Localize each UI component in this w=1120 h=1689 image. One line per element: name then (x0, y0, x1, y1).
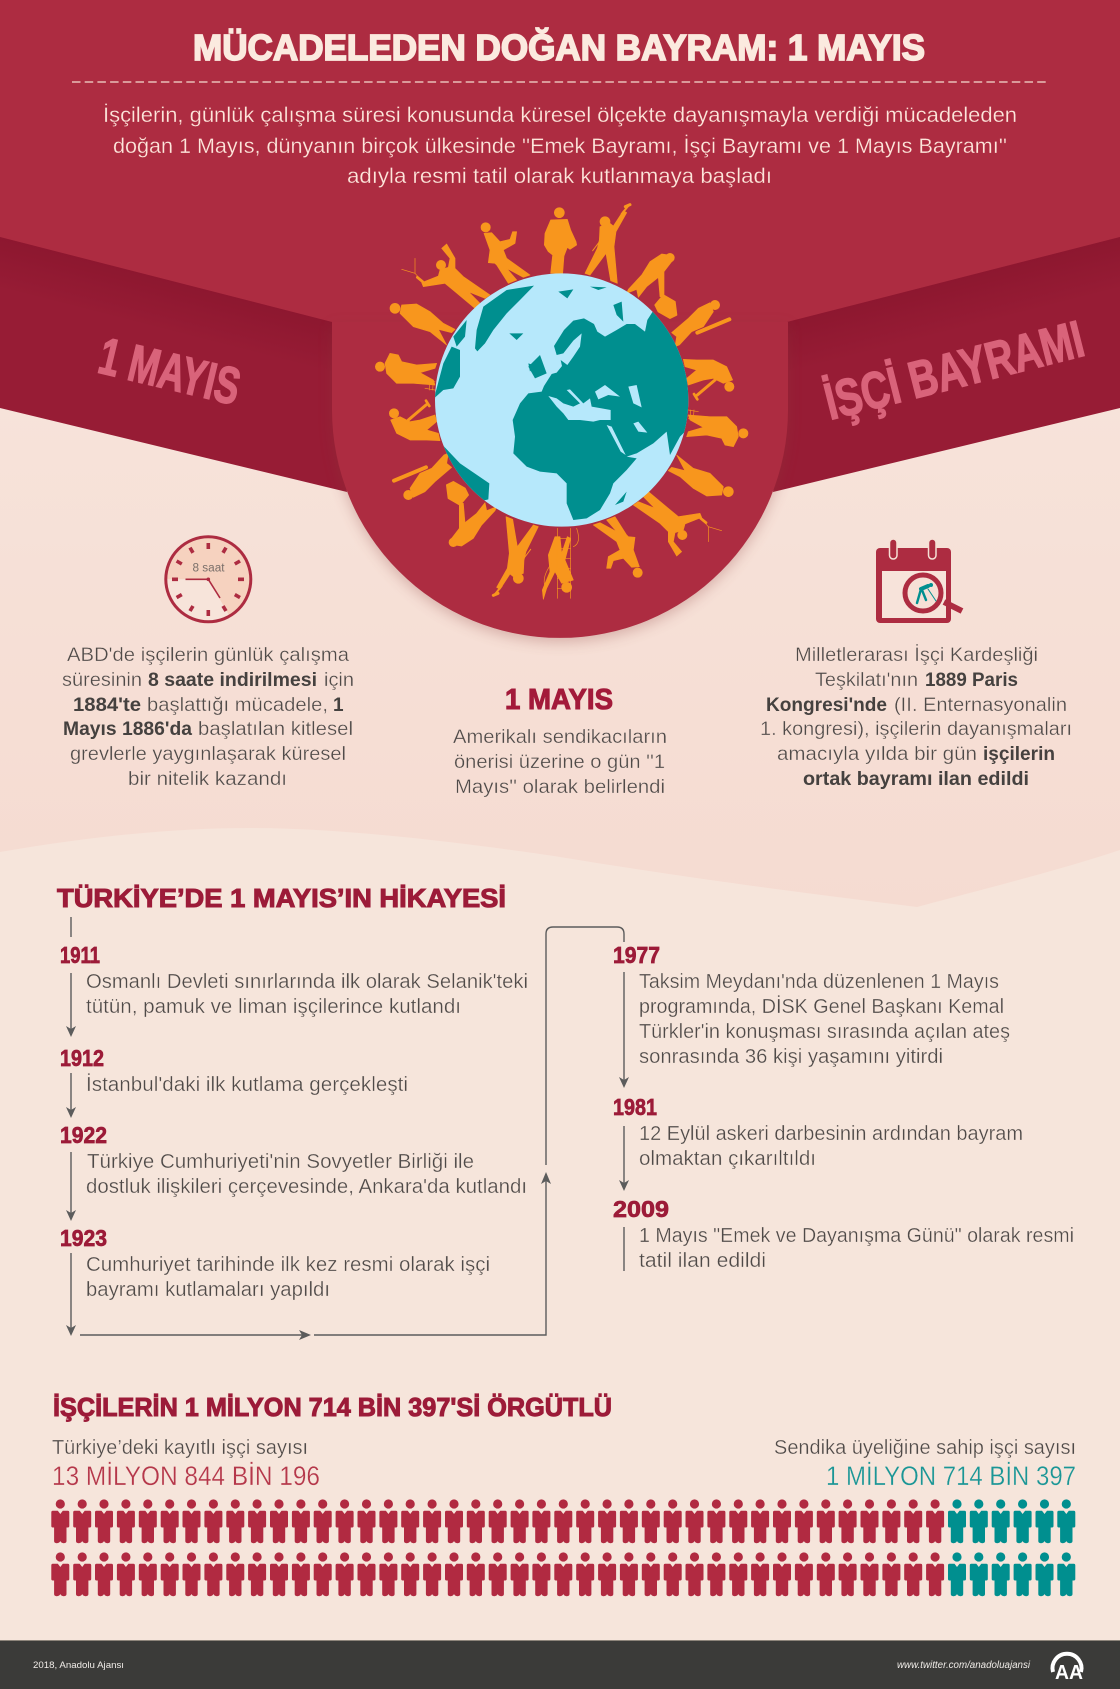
timeline entry: 1912: İstanbul'daki ilk kutlama gerçekleşti (86, 1073, 408, 1096)
text block: left column: Mayıs 1886'da (63, 719, 192, 740)
stat: registered workers (52, 1437, 320, 1491)
text block: left column: 8 saate indirilmesi (148, 670, 317, 691)
stat: registered workers: Türkiye’deki kayıtlı işçi sayısı (52, 1437, 308, 1459)
timeline entry: 2009: 1 Mayıs "Emek ve Dayanışma Günü" olarak resmi (639, 1225, 1074, 1247)
timeline entry: 1977: programında, DİSK Genel Başkanı Kemal (639, 995, 1004, 1018)
timeline entry: 1911 (60, 942, 528, 1018)
icon: calendar with magnifier (876, 539, 962, 623)
intro text: doğan 1 Mayıs, dünyanın birçok ülkesinde ''Emek Bayramı, İşçi Bayramı ve 1 Mayıs Bayramı'' (113, 134, 1007, 158)
text block: left column: ABD'de işçilerin günlük çalışma (67, 645, 349, 666)
wing: right ribbon (773, 237, 1120, 492)
text block: right column: Milletlerarası İşçi Kardeşliği (795, 645, 1038, 666)
text block: left column (62, 645, 354, 790)
timeline entry: 1911: 1911 (60, 942, 100, 968)
text block: right column: (II. Enternasyonalin (894, 695, 1067, 716)
text block: right column: ortak bayramı ilan edildi (803, 769, 1029, 790)
timeline entry: 1981 (613, 1094, 1023, 1170)
footer url: www.twitter.com/anadoluajansi (897, 1660, 1031, 1671)
text block: right column: Kongresi'nde (766, 695, 887, 716)
footer bar (0, 1640, 1120, 1689)
text block: left column: 1 (333, 695, 344, 716)
text block: center column: Mayıs'' olarak belirlendi (455, 777, 665, 798)
timeline entry: 1977: 1977 (613, 942, 660, 968)
timeline entry: 2009: tatil ilan edildi (639, 1250, 766, 1272)
text block: center column (453, 727, 667, 798)
timeline entry: 1981: 12 Eylül askeri darbesinin ardından bayram (639, 1123, 1023, 1145)
heading: center 1 MAYIS: 1 MAYIS (505, 684, 613, 716)
timeline entry: 1977: sonrasında 36 kişi yaşamını yitirdi (639, 1046, 943, 1068)
text block: left column: bir nitelik kazandı (128, 769, 287, 790)
timeline entry: 1977: Taksim Meydanı'nda düzenlenen 1 Mayıs (639, 971, 999, 993)
intro text: İşçilerin, günlük çalışma süresi konusunda küresel ölçekte dayanışmayla verdiği mücadeleden (103, 103, 1017, 127)
background wave panel (0, 828, 1120, 1640)
intro text (103, 103, 1017, 188)
title: MÜCADELEDEN DOĞAN BAYRAM: 1 MAYIS (193, 27, 925, 68)
stat: union members (774, 1437, 1076, 1491)
text block: right column: amacıyla yılda bir gün (777, 744, 977, 765)
central crimson shield (332, 322, 788, 638)
timeline entry: 1923: 1923 (60, 1225, 107, 1251)
timeline: connector arrows (66, 917, 629, 1340)
timeline entry: 1911: Osmanlı Devleti sınırlarında ilk olarak Selanik'teki (86, 971, 528, 993)
shield shadow (332, 326, 788, 642)
globe (434, 273, 693, 527)
text block: right column: işçilerin (983, 744, 1055, 765)
text block: left column: için (324, 670, 354, 691)
icon: clock 8 saat: 8 saat (192, 562, 225, 574)
text block: right column: 1889 Paris (925, 670, 1018, 691)
text block: right column (760, 645, 1072, 790)
timeline entry: 1981: 1981 (613, 1094, 657, 1120)
text block: center column: Amerikalı sendikacıların (453, 727, 667, 748)
icon: clock 8 saat (166, 537, 251, 622)
text block: left column: grevlerle yaygınlaşarak küresel (70, 744, 346, 765)
text block: left column: 1884'te (73, 695, 141, 716)
footer credit: 2018, Anadolu Ajansı (33, 1660, 124, 1671)
heading: union membership: İŞÇİLERİN 1 MİLYON 714 BİN 397'Sİ ÖRGÜTLÜ (53, 1392, 612, 1422)
text block: left column: başlatılan kitlesel (198, 719, 353, 740)
islands and other continents (434, 286, 627, 505)
timeline entry: 1922: dostluk ilişkileri çerçevesinde, Ankara'da kutlandı (86, 1176, 527, 1198)
timeline entry: 1981: olmaktan çıkarıltıldı (639, 1148, 816, 1170)
heading: Türkiye'de 1 Mayıs'ın hikayesi: TÜRKİYE’DE 1 MAYIS’IN HİKAYESİ (57, 883, 506, 913)
timeline entry: 2009 (613, 1196, 1074, 1272)
logo: AA (1053, 1654, 1083, 1684)
timeline entry: 1977: Türkler'in konuşması sırasında açılan ateş (639, 1021, 1010, 1043)
continent: Eurasia and Africa (513, 311, 693, 520)
timeline entry: 1922 (60, 1122, 527, 1198)
text block: left column: başlattığı mücadele, (147, 695, 328, 716)
stat: registered workers: 13 MİLYON 844 BİN 196 (52, 1460, 320, 1491)
text block: left column: süresinin (62, 670, 142, 691)
timeline entry: 2009: 2009 (613, 1196, 669, 1222)
timeline entry: 1911: tütün, pamuk ve liman işçilerince kutlandı (86, 996, 461, 1018)
timeline entry: 1912: 1912 (60, 1045, 104, 1071)
text block: right column: 1. kongresi), işçilerin dayanışmaları (760, 719, 1072, 740)
logo: AA: AA (1055, 1662, 1083, 1684)
intro text: adıyla resmi tatil olarak kutlanmaya başladı (347, 164, 772, 188)
ribbon text: 1 MAYIS: 1 MAYIS (93, 327, 246, 417)
timeline entry: 1923: bayramı kutlamaları yapıldı (86, 1279, 330, 1301)
timeline entry: 1923: Cumhuriyet tarihinde ilk kez resmi olarak işçi (86, 1254, 490, 1276)
text block: right column: Teşkilatı'nın (815, 670, 918, 691)
wing: left ribbon (0, 237, 347, 492)
timeline entry: 1922: 1922 (60, 1122, 107, 1148)
text block: center column: önerisi üzerine o gün ''1 (454, 752, 665, 773)
stat: union members: 1 MİLYON 714 BİN 397 (826, 1460, 1076, 1491)
pictogram: rows of workers (51, 1499, 1075, 1596)
header panel crimson (0, 0, 1120, 420)
seas (548, 385, 647, 455)
stat: union members: Sendika üyeliğine sahip işçi sayısı (774, 1437, 1076, 1459)
timeline entry: 1977 (613, 942, 1010, 1068)
timeline entry: 1923 (60, 1225, 490, 1301)
timeline entry: 1922: Türkiye Cumhuriyeti'nin Sovyetler Birliği ile (87, 1151, 474, 1173)
workers ring around the globe (375, 205, 748, 599)
timeline entry: 1912 (60, 1045, 408, 1096)
